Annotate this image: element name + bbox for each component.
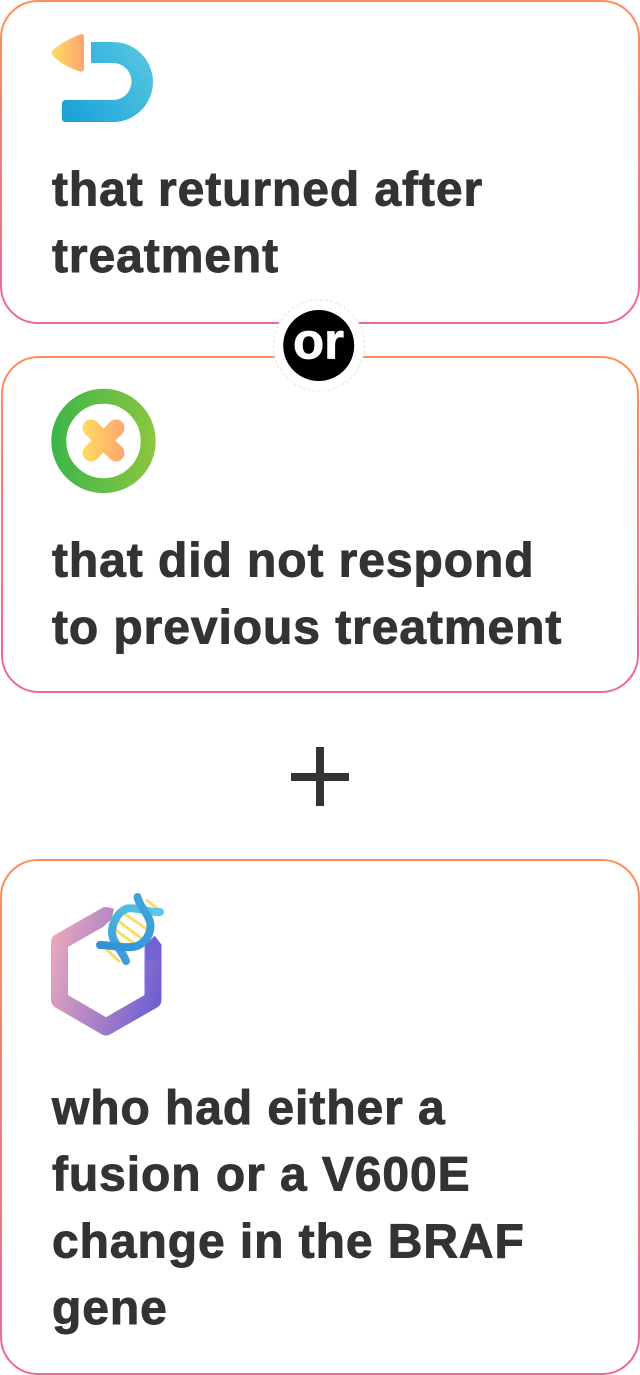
icon: return arrow (52, 34, 153, 122)
panel: BRAF gene change (1, 860, 639, 1374)
text: fusion or V600E change in BRAF gene: who had either a (51, 1082, 446, 1135)
badge: or: or (293, 312, 344, 370)
panel: did not respond to treatment (2, 357, 638, 692)
icon: plus sign (291, 747, 349, 806)
text: fusion or V600E change in BRAF gene: change in the BRAF (52, 1216, 525, 1268)
badge: or (274, 300, 364, 391)
text: fusion or V600E change in BRAF gene: fusion or a V600E (52, 1148, 471, 1202)
text: fusion or V600E change in BRAF gene: gene (52, 1282, 168, 1335)
text: did not respond to previous treatment: that did not respond (52, 534, 535, 588)
panel: returned after treatment (1, 1, 639, 323)
icon: cross in ring (59, 396, 148, 486)
text: that returned after treatment: treatment (52, 230, 279, 283)
icon: hexagon with DNA (60, 892, 166, 1027)
text: did not respond to previous treatment: to previous treatment (52, 602, 562, 654)
text: that returned after treatment: that returned after (52, 164, 483, 216)
